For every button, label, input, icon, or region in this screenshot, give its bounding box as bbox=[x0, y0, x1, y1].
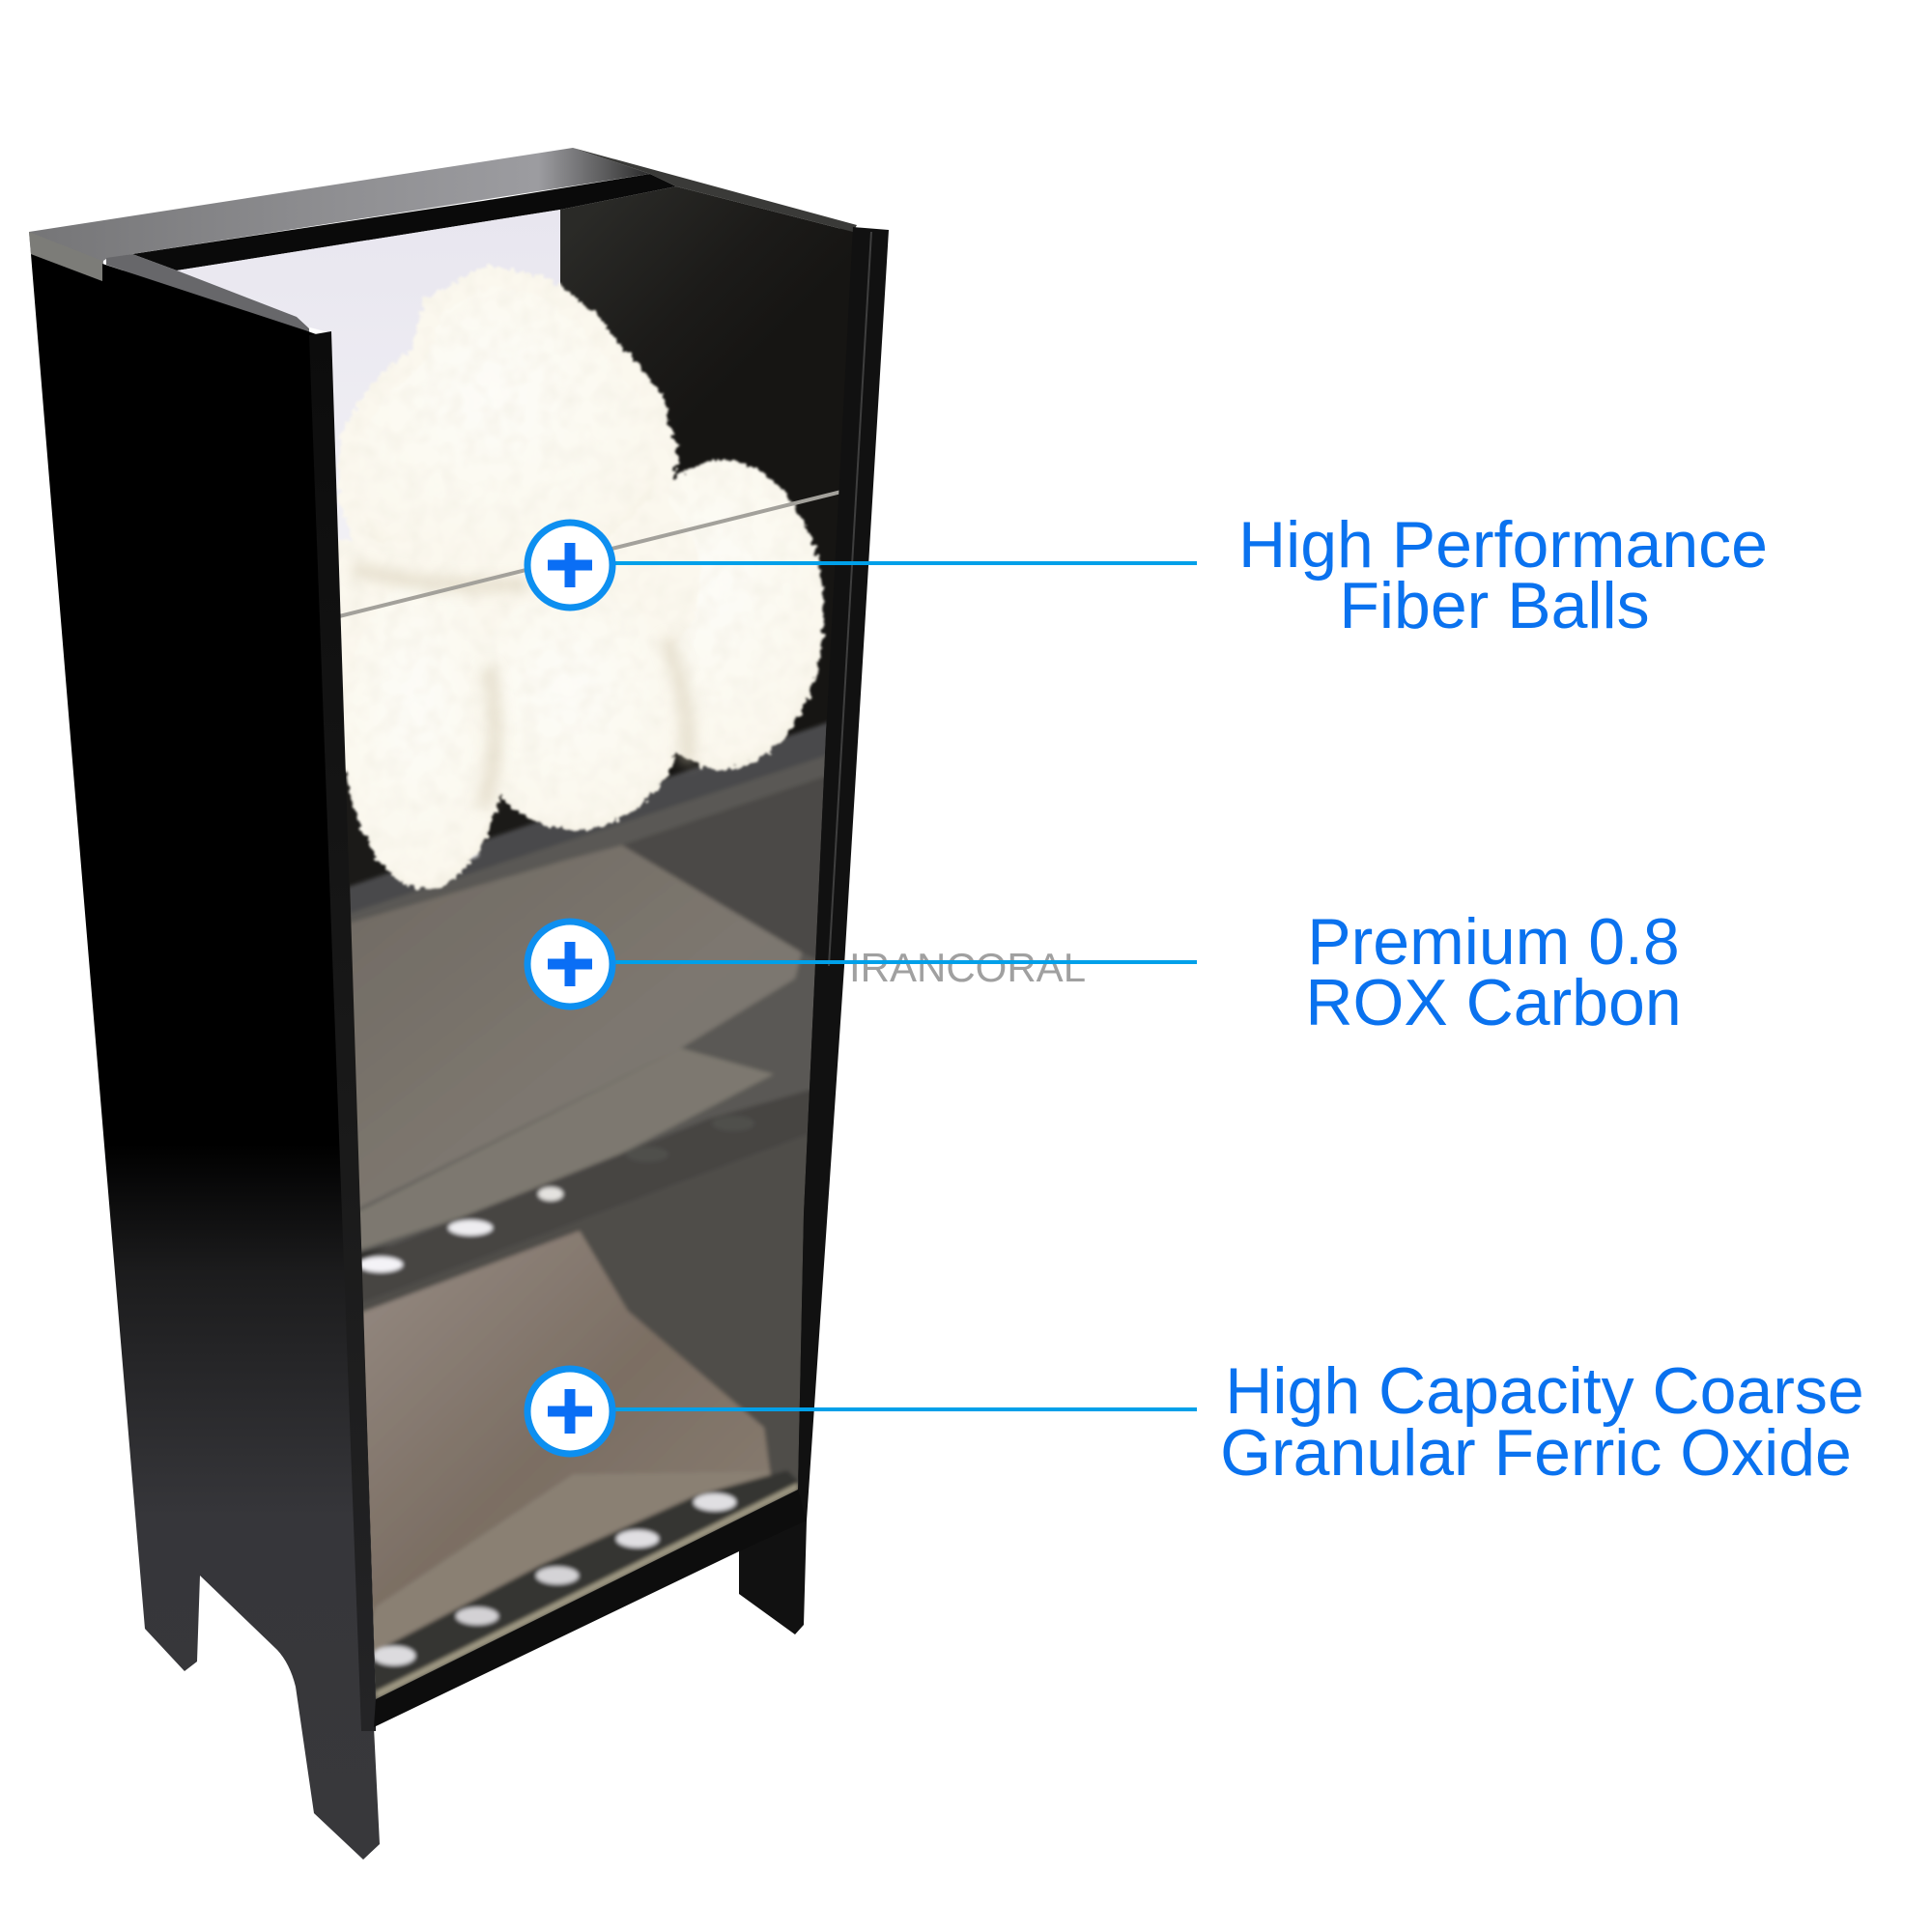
label line 2: ferric oxide: Granular Ferric Oxide bbox=[1220, 1416, 1852, 1490]
callout: ferric oxide bbox=[527, 1354, 1864, 1454]
marker bbox=[527, 922, 612, 1007]
label: High Capacity Coarse bbox=[1225, 1354, 1864, 1428]
label line 2: fiber balls: Fiber Balls bbox=[1339, 569, 1650, 642]
box back interior bbox=[132, 174, 853, 1699]
bottom crossbar bbox=[374, 1490, 807, 1727]
middle chamber back bbox=[333, 753, 836, 1256]
callout: fiber balls bbox=[527, 508, 1768, 608]
left side panel bbox=[31, 254, 380, 1860]
label: High Performance bbox=[1238, 508, 1768, 582]
bottom strip with holes bbox=[367, 1470, 807, 1705]
top rim bbox=[29, 148, 857, 334]
window interior bbox=[328, 720, 836, 1719]
fiber balls bbox=[324, 275, 824, 889]
front left post bbox=[309, 331, 376, 1731]
ball shading bbox=[353, 568, 688, 807]
lower chamber bag bbox=[348, 1231, 773, 1671]
lower chamber back bbox=[363, 1132, 808, 1698]
marker bbox=[527, 523, 612, 608]
middle chamber bag bbox=[338, 845, 802, 1252]
right post and foot bbox=[739, 227, 889, 1634]
product: filter media box bbox=[29, 148, 889, 1860]
shelf strip with holes bbox=[361, 1090, 810, 1291]
label line 2: carbon: ROX Carbon bbox=[1305, 966, 1682, 1039]
upper chamber floor bbox=[328, 720, 836, 919]
callout: carbon bbox=[527, 905, 1680, 1007]
glass shelf edge bbox=[339, 489, 853, 616]
marker bbox=[527, 1369, 612, 1454]
label: Premium 0.8 bbox=[1307, 905, 1680, 979]
watermark: IRANCORAL bbox=[849, 945, 1086, 990]
